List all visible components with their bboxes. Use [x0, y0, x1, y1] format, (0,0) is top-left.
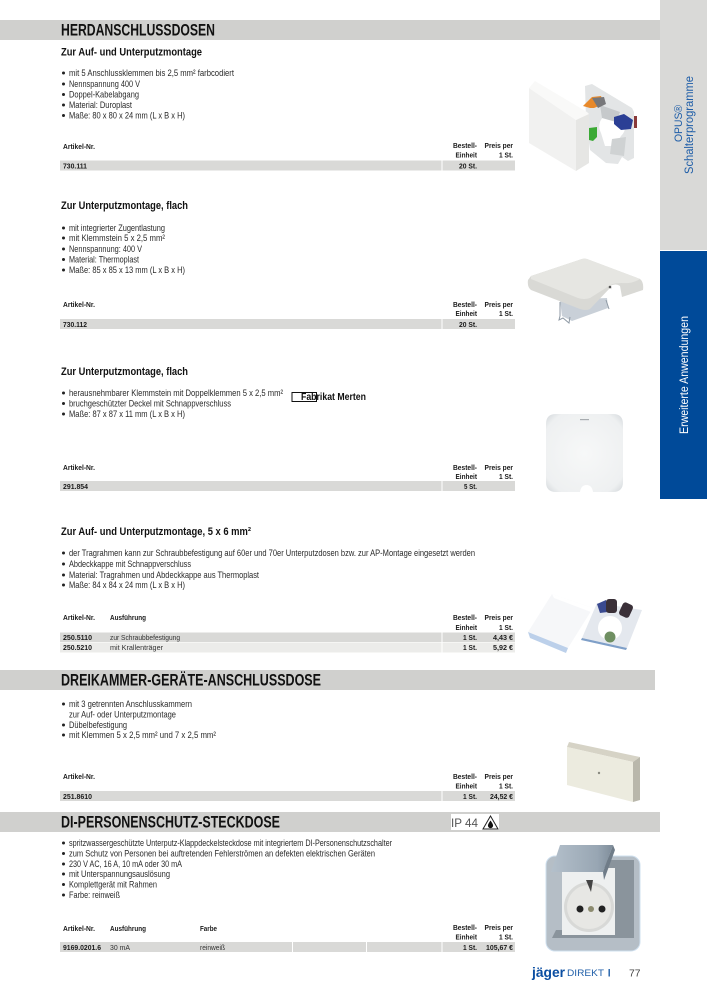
article table: Bestell-	[453, 463, 477, 472]
article table: zur Schraubbefestigung	[110, 633, 180, 642]
article table: 1 St.	[499, 782, 513, 790]
article table: Artikel-Nr.	[63, 924, 95, 933]
article table: Bestell-	[453, 923, 477, 932]
page number: 77	[629, 968, 641, 980]
article table: Ausführung	[110, 613, 146, 622]
article table	[60, 141, 515, 170]
article table: 1 St.	[499, 623, 513, 632]
feature list: Material: Tragrahmen und Abdeckkappe aus Thermoplast	[69, 570, 259, 580]
article table: Preis per	[484, 923, 513, 932]
callout: Fabrikat Merten: Fabrikat Merten	[301, 391, 366, 403]
article table: mit Krallenträger	[110, 643, 163, 652]
feature list: Doppel-Kabelabgang	[69, 90, 139, 100]
article table	[60, 613, 515, 652]
feature list: bruchgeschützter Deckel mit Schnappverschluss	[69, 398, 231, 408]
article table: 291.854	[63, 482, 89, 491]
feature list: mit integrierter Zugentlastung	[69, 223, 165, 233]
feature list: mit Klemmstein 5 x 2,5 mm²	[69, 233, 165, 243]
article table: Preis per	[484, 772, 513, 781]
heading bar: DI-Personenschutz-Steckdose	[0, 812, 660, 832]
article table: Artikel-Nr.	[63, 463, 95, 472]
article table: 9169.0201.6	[63, 943, 101, 952]
feature list: spritzwassergeschützte Unterputz-Klappdeckelsteckdose mit integriertem DI-Personenschutzschalter	[69, 838, 392, 848]
panel: Dreikammer-Geräte-Anschlussdose	[60, 699, 640, 802]
article table: 20 St.	[459, 320, 477, 329]
feature list: mit Klemmen 5 x 2,5 mm² und 7 x 2,5 mm²	[69, 730, 216, 740]
article table: Bestell-	[453, 141, 477, 150]
panel: Unterputzmontage flach 730.112	[60, 200, 643, 329]
feature list: Material: Thermoplast	[69, 254, 139, 264]
article table	[60, 923, 515, 952]
article table: reinweiß	[200, 943, 225, 952]
article table: Artikel-Nr.	[63, 613, 95, 622]
product photo: surface box with open terminal block	[529, 81, 637, 171]
badge: IP 44 protection rating	[451, 814, 499, 830]
article table: Einheit	[456, 309, 477, 318]
panel: Auf- und Unterputzmontage	[60, 46, 637, 171]
feature list: 230 V AC, 16 A, 10 mA oder 30 mA	[69, 859, 183, 869]
article table: Einheit	[456, 623, 477, 632]
subheading: Zur Unterputzmontage, flach	[61, 200, 188, 212]
article table: 1 St.	[499, 472, 513, 481]
feature list: Nennspannung: 400 V	[69, 244, 143, 254]
feature list: zur Auf- oder Unterputzmontage	[69, 710, 176, 720]
product photo: square white cover	[546, 414, 623, 492]
article table: 1 St.	[463, 633, 477, 642]
article table: 24,52 €	[490, 792, 514, 801]
feature list: mit 3 getrennten Anschlusskammern	[69, 699, 192, 709]
article table: Bestell-	[453, 772, 477, 781]
feature list: der Tragrahmen kann zur Schraubbefestigung auf 60er und 70er Unterputzdosen bzw. zur AP-Montage eingesetzt werden	[69, 548, 475, 558]
article table: 1 St.	[463, 943, 477, 952]
subheading: Zur Auf- und Unterputzmontage, 5 x 6 mm²	[61, 526, 251, 538]
article table: Artikel-Nr.	[63, 142, 95, 151]
article table	[60, 300, 515, 329]
article table: Ausführung	[110, 924, 146, 933]
feature list	[62, 388, 283, 419]
feature list	[62, 68, 234, 120]
article table: 1 St.	[499, 150, 513, 160]
footer logo: Jäger Direkt	[531, 964, 610, 980]
article table: Bestell-	[453, 613, 477, 622]
feature list: Abdeckkappe mit Schnappverschluss	[69, 559, 191, 569]
article table: Artikel-Nr.	[63, 772, 95, 781]
panel: DI-Personenschutz-Steckdose	[60, 838, 640, 952]
article table: 1 St.	[463, 643, 477, 652]
heading bar: Herdanschlussdosen: HERDANSCHLUSSDOSEN	[61, 22, 215, 40]
article table: Preis per	[484, 613, 513, 622]
article table: Einheit	[456, 782, 477, 790]
article table	[60, 772, 515, 801]
article table: 730.112	[63, 320, 87, 329]
heading bar: Dreikammer-Geräte-Anschlussdose: DREIKAMMER-GERÄTE-ANSCHLUSSDOSE	[61, 672, 321, 690]
article table: 250.5110	[63, 633, 92, 642]
article table: 730.111	[63, 162, 87, 170]
heading bar: Dreikammer-Geräte-Anschlussdose	[0, 670, 655, 690]
article table: Einheit	[456, 150, 477, 160]
article table: 1 St.	[463, 792, 477, 801]
article table: Einheit	[456, 472, 477, 481]
article table: Bestell-	[453, 300, 477, 309]
sidebar tab: OPUS Schalterprogramme	[660, 0, 707, 250]
feature list: Maße: 80 x 80 x 24 mm (L x B x H)	[69, 110, 185, 120]
feature list: Maße: 85 x 85 x 13 mm (L x B x H)	[69, 265, 185, 275]
product photo: cap and carrier frame	[528, 594, 642, 653]
sidebar tab: Erweiterte Anwendungen: Erweiterte Anwendungen	[679, 316, 691, 434]
article table: Einheit	[456, 932, 477, 942]
product photo: flat cover with recessed box	[528, 259, 643, 323]
sidebar tab: Erweiterte Anwendungen	[660, 251, 707, 499]
panel: Auf- und Unterputzmontage 5 x 6 mm²	[60, 526, 642, 653]
feature list	[62, 838, 392, 900]
article table: Preis per	[484, 300, 513, 309]
footer logo: Jäger Direkt: DIREKT	[567, 968, 604, 979]
feature list: mit 5 Anschlussklemmen bis 2,5 mm² farbcodiert	[69, 68, 234, 78]
feature list	[62, 548, 475, 590]
article table: Artikel-Nr.	[63, 300, 95, 309]
article table	[60, 463, 515, 491]
product photo: cream rectangular box	[567, 742, 640, 802]
subheading: Zur Unterputzmontage, flach	[61, 366, 188, 378]
feature list: Maße: 87 x 87 x 11 mm (L x B x H)	[69, 409, 185, 419]
article table: 251.8610	[63, 792, 92, 801]
subheading: Zur Auf- und Unterputzmontage	[61, 46, 202, 58]
feature list: Material: Duroplast	[69, 100, 132, 110]
feature list: Komplettgerät mit Rahmen	[69, 880, 157, 890]
article table: 20 St.	[459, 162, 477, 170]
article table: 105,67 €	[486, 943, 514, 952]
feature list: zum Schutz von Personen bei auftretenden Fehlerströmen an defekten elektrischen Geräten	[69, 848, 375, 858]
article table: 30 mA	[110, 943, 130, 952]
article table: 1 St.	[499, 309, 513, 318]
feature list: Nennspannung 400 V	[69, 79, 141, 89]
article table: Farbe	[200, 924, 217, 933]
feature list	[62, 699, 216, 740]
badge: IP 44 protection rating: IP 44	[451, 816, 478, 830]
footer logo: Jäger Direkt: jäger	[531, 964, 566, 980]
sidebar tab: OPUS Schalterprogramme: OPUS®	[673, 105, 685, 142]
heading bar: DI-Personenschutz-Steckdose: DI-PERSONENSCHUTZ-STECKDOSE	[61, 814, 280, 832]
article table: Preis per	[484, 463, 513, 472]
feature list: Maße: 84 x 84 x 24 mm (L x B x H)	[69, 580, 185, 590]
feature list: mit Unterspannungsauslösung	[69, 869, 170, 879]
panel: Unterputzmontage flach 291.854	[60, 366, 623, 492]
article table: 4,43 €	[493, 633, 514, 642]
sidebar tab: OPUS Schalterprogramme: Schalterprogramme	[684, 76, 696, 174]
article table: 5 St.	[464, 482, 477, 491]
article table: 250.5210	[63, 643, 92, 652]
heading bar: Herdanschlussdosen	[0, 20, 660, 40]
feature list	[62, 223, 185, 275]
article table: 1 St.	[499, 932, 513, 942]
feature list: Farbe: reinweiß	[69, 890, 120, 900]
product photo: splash-proof socket with flip lid	[546, 845, 640, 951]
feature list: Dübelbefestigung	[69, 720, 127, 730]
feature list: herausnehmbarer Klemmstein mit Doppelklemmen 5 x 2,5 mm²	[69, 388, 283, 398]
article table: Preis per	[484, 141, 513, 150]
article table: 5,92 €	[493, 643, 514, 652]
